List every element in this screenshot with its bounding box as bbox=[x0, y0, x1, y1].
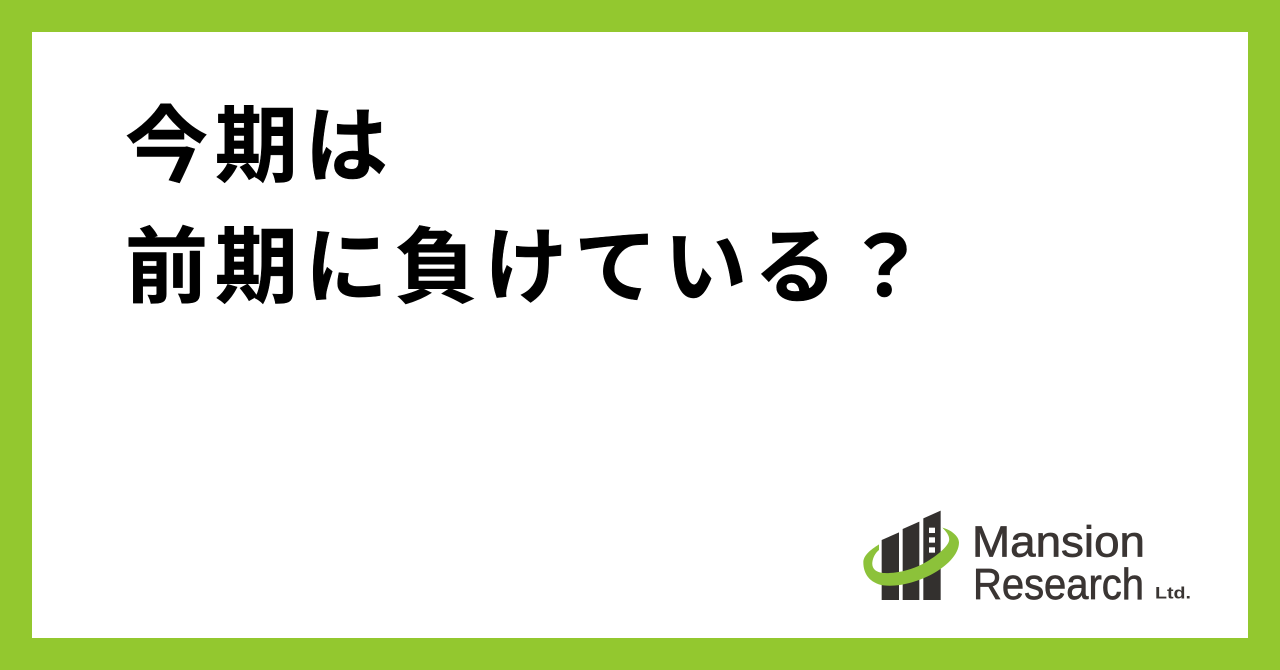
icon: buildings with green swoosh bbox=[863, 511, 959, 600]
wordmark: Mansion: Mansion bbox=[972, 518, 1145, 566]
title: 前期に負けている？ bbox=[125, 221, 934, 314]
title bbox=[125, 100, 934, 314]
wordmark: Ltd.: Ltd. bbox=[1155, 584, 1191, 602]
title: 今期は bbox=[125, 100, 395, 193]
wordmark: Research: Research bbox=[973, 560, 1144, 609]
